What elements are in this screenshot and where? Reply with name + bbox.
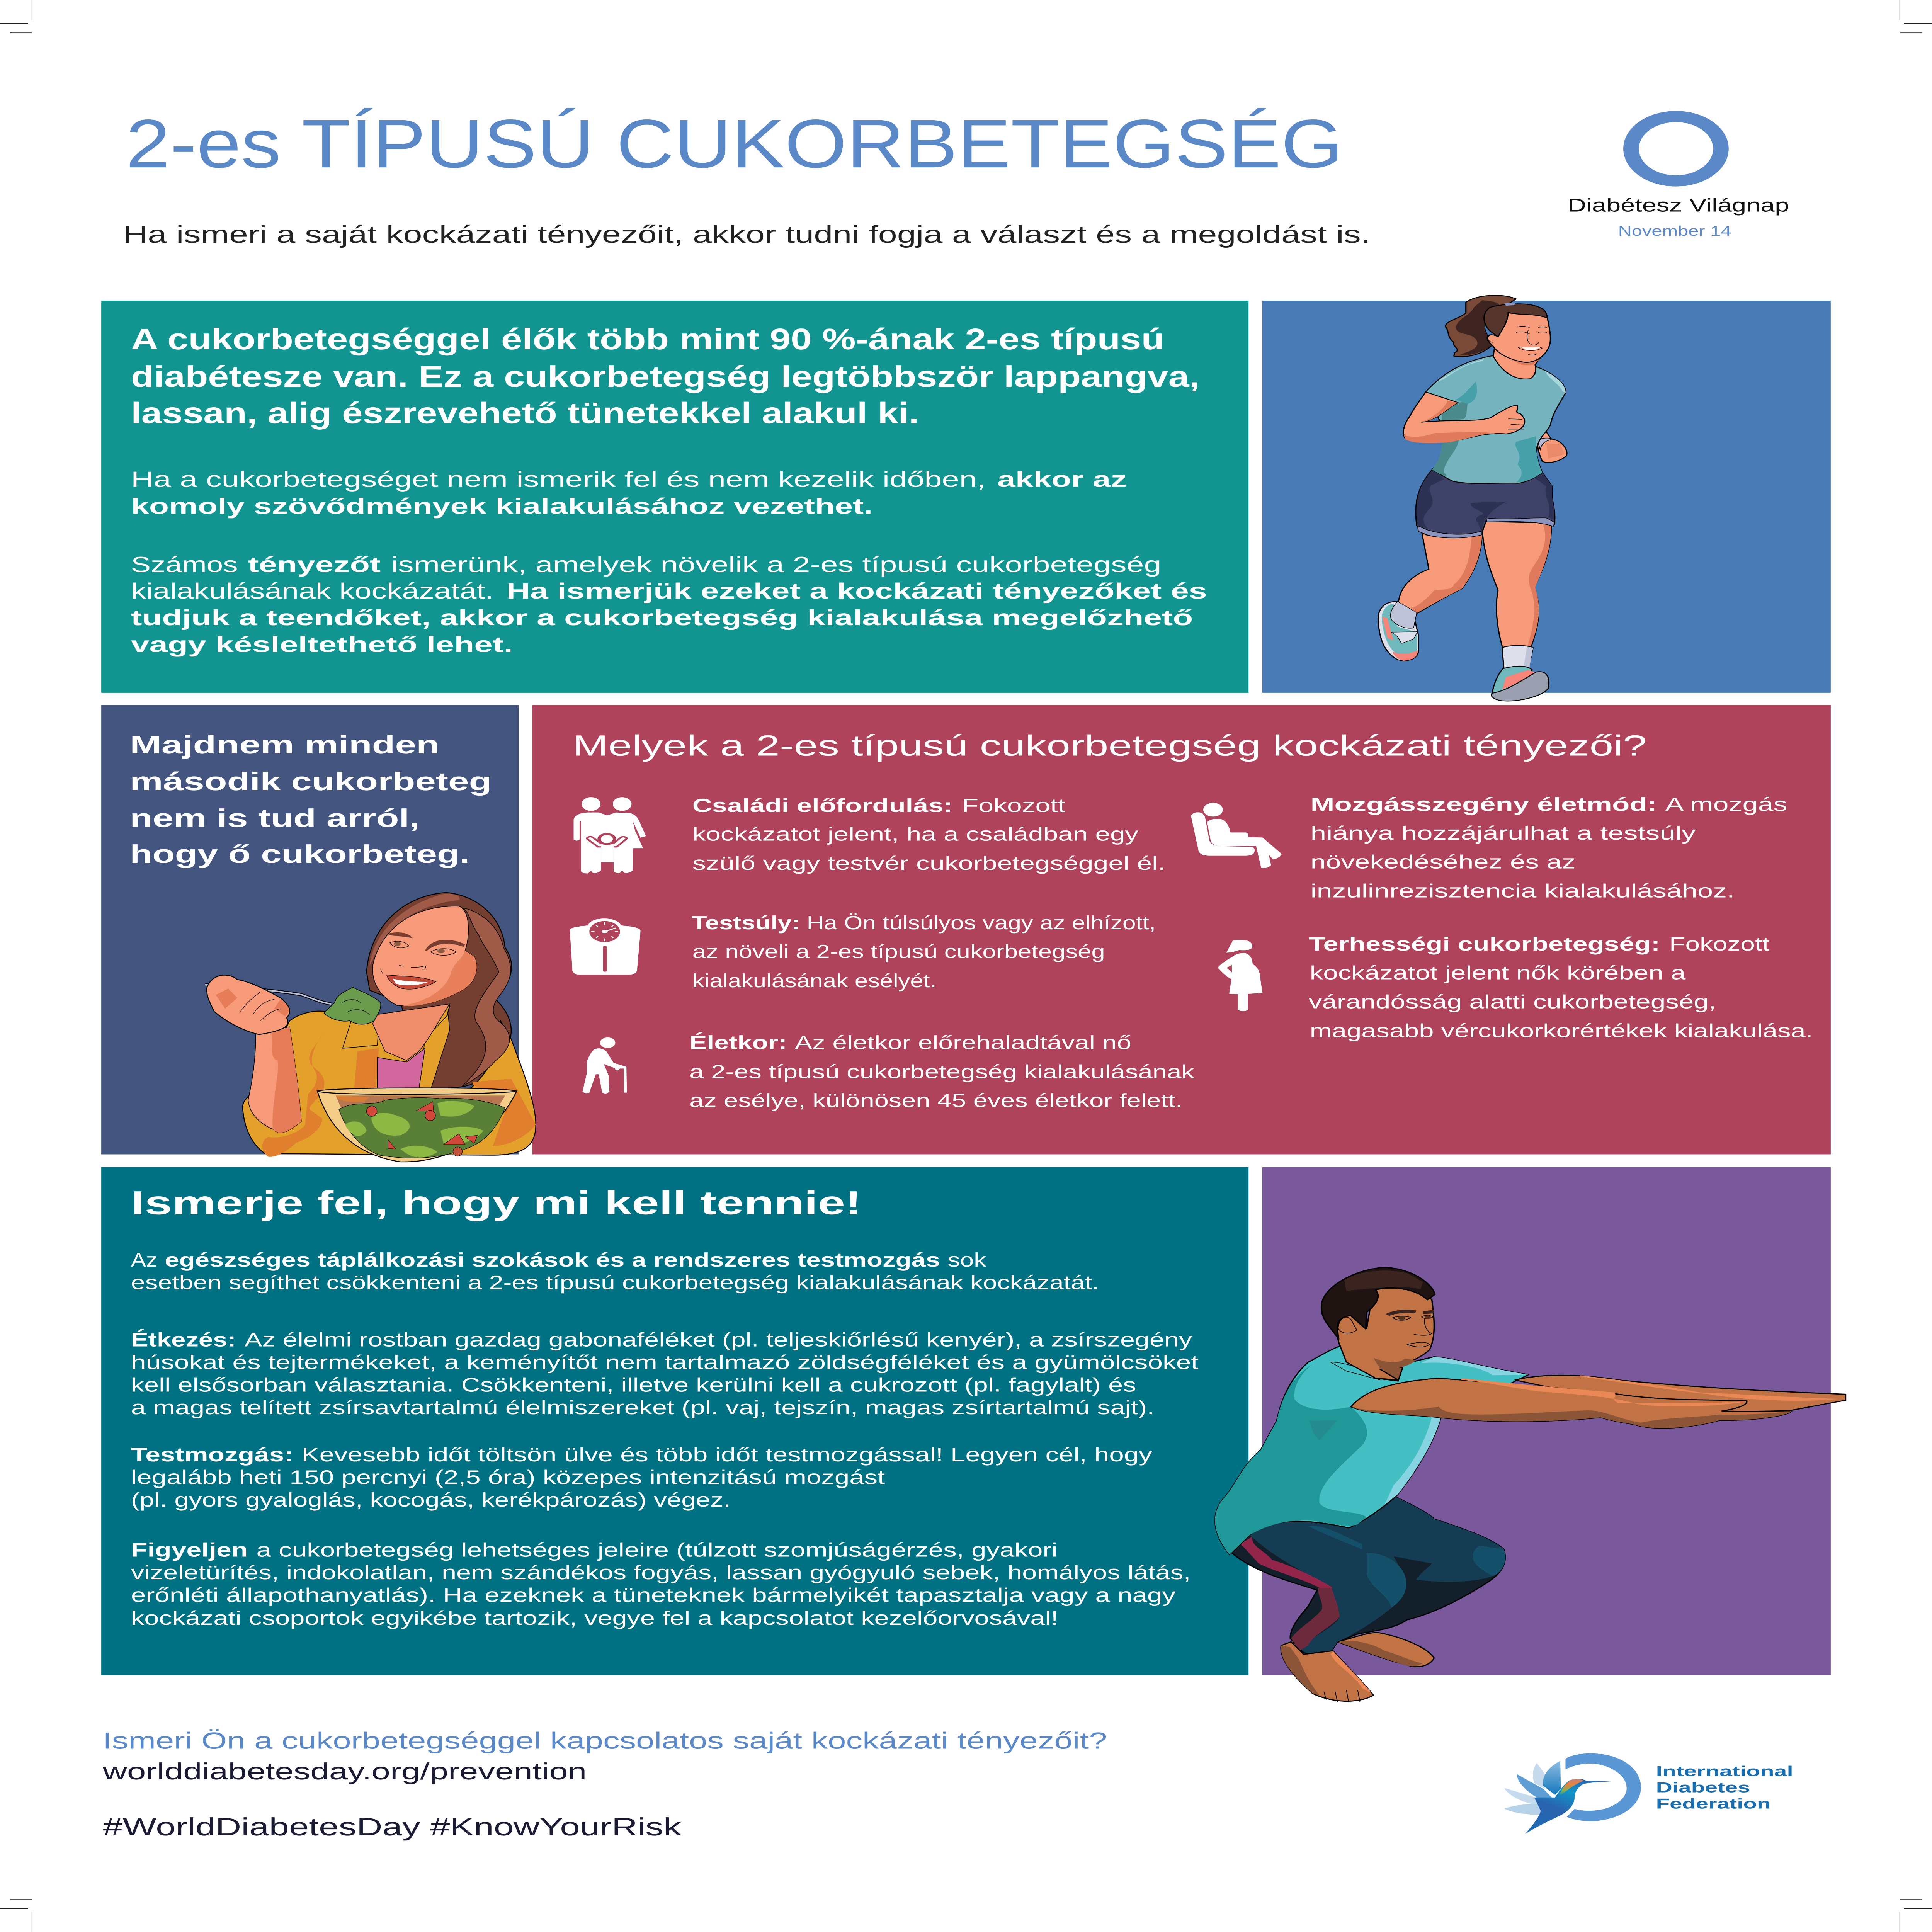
risk factors heading: Melyek a 2-es típusú cukorbetegség kockázati tényezői? xyxy=(573,729,1647,762)
age text: az esélye, különösen 45 éves életkor felett. xyxy=(689,1090,1182,1111)
sedentary lifestyle text xyxy=(1311,794,1787,901)
action intro: esetben segíthet csökkenteni a 2-es típusú cukorbetegség kialakulásának kockázatát. xyxy=(131,1271,1099,1294)
gestational diabetes text: várandósság alatti cukorbetegség, xyxy=(1309,991,1716,1012)
sedentary lifestyle text: növekedéséhez és az xyxy=(1311,851,1575,872)
warning signs advice: vizeletürítés, indokolatlan, nem szándékos fogyás, lassan gyógyuló sebek, homályos látás, xyxy=(131,1561,1190,1583)
body weight text: kialakulásának esélyét. xyxy=(692,970,937,992)
intro paragraph 1: akkor az xyxy=(997,467,1127,492)
action intro: sok xyxy=(947,1249,986,1271)
exercise advice: Testmozgás: xyxy=(131,1444,293,1466)
panel: intro text xyxy=(101,301,1248,693)
logo: World Diabetes Day circle: November 14 xyxy=(1618,223,1731,239)
footer question: Ismeri Ön a cukorbetegséggel kapcsolatos saját kockázati tényezőit? xyxy=(103,1728,1107,1754)
intro paragraph 1: komoly szövődmények kialakulásához vezethet. xyxy=(131,494,872,519)
exercise advice xyxy=(131,1444,1152,1511)
illustration: woman eating salad xyxy=(205,893,536,1162)
arm xyxy=(248,1027,301,1133)
intro paragraph 2 xyxy=(131,552,1207,657)
panel: risk factors xyxy=(532,705,1831,1154)
bowl xyxy=(317,1091,517,1162)
back shoe xyxy=(1378,601,1418,661)
lettuce on fork xyxy=(324,987,381,1024)
neck xyxy=(373,1004,450,1061)
undiagnosed statement: Majdnem minden xyxy=(130,731,439,759)
fork xyxy=(205,985,331,1004)
eating advice: a magas telített zsírsavtartalmú élelmiszereket (pl. vaj, tejszín, magas zsírtartalmú sajt). xyxy=(131,1396,1154,1418)
gestational diabetes text: Terhességi cukorbetegség: xyxy=(1309,934,1660,955)
footer link: worlddiabetesday.org/prevention xyxy=(102,1758,587,1784)
intro paragraph 2: vagy késleltethető lehet. xyxy=(131,632,513,657)
intro paragraph 1 xyxy=(131,467,1127,519)
icon: pregnant woman xyxy=(1218,940,1262,1011)
icon: elderly person xyxy=(583,1037,627,1094)
eating advice: Az élelmi rostban gazdag gabonaféléket (pl. teljeskiőrlésű kenyér), a zsírszegény xyxy=(245,1328,1192,1351)
exercise advice: (pl. gyors gyaloglás, kocogás, kerékpározás) végez. xyxy=(131,1489,731,1511)
pants dark base xyxy=(1232,1496,1505,1655)
sedentary lifestyle text: Mozgásszegény életmód: xyxy=(1311,794,1656,815)
neck and head xyxy=(1340,1339,1403,1381)
organisation name: Federation xyxy=(1656,1796,1770,1812)
organisation name xyxy=(1656,1763,1793,1812)
warning signs advice xyxy=(131,1539,1190,1629)
family history text: Fokozott xyxy=(962,795,1065,816)
sedentary lifestyle text: A mozgás xyxy=(1665,794,1787,815)
gestational diabetes text xyxy=(1309,934,1813,1042)
subtitle: Ha ismeri a saját kockázati tényezőit, akkor tudni fogja a választ és a megoldást is. xyxy=(123,221,1370,248)
age text xyxy=(689,1032,1195,1111)
warning signs advice: a cukorbetegség lehetséges jeleire (túlzott szomjúságérzés, gyakori xyxy=(257,1539,1058,1561)
neck and head xyxy=(1493,345,1543,379)
exercise advice: legalább heti 150 percnyi (2,5 óra) közepes intenzitású mozgást xyxy=(131,1466,885,1488)
front shoe xyxy=(1492,666,1532,694)
logo: World Diabetes Day circle: Diabétesz Világnap xyxy=(1568,195,1789,216)
front arm xyxy=(1351,1378,1792,1428)
warning signs advice: Figyeljen xyxy=(131,1539,248,1561)
action heading: Ismerje fel, hogy mi kell tennie! xyxy=(131,1184,862,1221)
left arm back xyxy=(1537,429,1567,463)
gestational diabetes text: magasabb vércukorkorértékek kialakulása. xyxy=(1310,1020,1813,1042)
panel: runner background xyxy=(1262,301,1831,693)
panel: undiagnosed fact xyxy=(101,705,519,1154)
intro paragraph 2: Ha ismerjük ezeket a kockázati tényezőket és xyxy=(507,579,1207,604)
intro paragraph 2: Számos xyxy=(131,552,238,577)
organisation name: International xyxy=(1656,1763,1793,1779)
warning signs advice: kockázati csoportok egyikébe tartozik, vegye fel a kapcsolatot kezelőorvosával! xyxy=(131,1607,1058,1629)
panel: exercise background xyxy=(1262,1167,1831,1675)
pants mid xyxy=(1250,1496,1505,1655)
jacket xyxy=(243,1005,536,1155)
title: 2-es TÍPUSÚ CUKORBETEGSÉG xyxy=(126,105,1343,182)
rear foot xyxy=(1337,1633,1434,1667)
age text: a 2-es típusú cukorbetegség kialakulásának xyxy=(689,1061,1195,1083)
intro paragraph 2: tényezőt xyxy=(248,552,381,577)
sedentary lifestyle text: inzulinrezisztencia kialakulásához. xyxy=(1311,880,1735,901)
intro heading: lassan, alig észrevehető tünetekkel alakul ki. xyxy=(131,396,919,430)
organisation name: Diabetes xyxy=(1656,1779,1750,1796)
face xyxy=(372,906,477,1006)
intro paragraph 2: tudjuk a teendőket, akkor a cukorbetegség kialakulása megelőzhető xyxy=(131,605,1193,630)
body weight text xyxy=(692,912,1156,992)
sedentary lifestyle text: hiánya hozzájárulhat a testsúly xyxy=(1311,823,1696,844)
shirt xyxy=(1426,355,1566,483)
intro heading: A cukorbetegséggel élők több mint 90 %-ának 2-es típusú xyxy=(131,322,1164,356)
action intro: Az xyxy=(131,1249,157,1271)
pants highlights xyxy=(1308,1526,1505,1608)
eating advice: Étkezés: xyxy=(131,1328,236,1351)
pink top xyxy=(378,1048,425,1090)
red stripe xyxy=(1241,1537,1333,1588)
action intro: egészséges táplálkozási szokások és a rendszeres testmozgás xyxy=(165,1249,940,1271)
body weight text: az növeli a 2-es típusú cukorbetegség xyxy=(692,941,1105,962)
warning signs advice: erőnléti állapothanyatlás). Ha ezeknek a tüneteknek bármelyikét tapasztalja vagy a nagy xyxy=(131,1584,1175,1606)
back leg xyxy=(1398,531,1482,613)
undiagnosed statement: hogy ő cukorbeteg. xyxy=(130,840,470,868)
icon: sitting person xyxy=(1191,803,1282,868)
body weight text: Testsúly: xyxy=(692,912,800,934)
exercise advice: Kevesebb időt töltsön ülve és több időt testmozgással! Legyen cél, hogy xyxy=(302,1444,1152,1466)
bowl rim xyxy=(317,1088,517,1094)
intro paragraph 1: Ha a cukorbetegséget nem ismerik fel és nem kezelik időben, xyxy=(131,467,985,492)
front foot xyxy=(1281,1642,1373,1701)
hashtags: #WorldDiabetesDay #KnowYourRisk xyxy=(103,1813,682,1841)
shirt xyxy=(1215,1346,1529,1554)
icon: weighing scale xyxy=(570,918,641,975)
undiagnosed statement: nem is tud arról, xyxy=(130,804,420,832)
logo: World Diabetes Day circle xyxy=(1568,117,1789,239)
icon: hummingbird and ring xyxy=(1504,1753,1641,1834)
age text: Életkor: xyxy=(689,1032,787,1053)
family history text: szülő vagy testvér cukorbetegséggel él. xyxy=(692,853,1165,874)
panel: what to do xyxy=(101,1167,1248,1675)
illustration: jogging woman xyxy=(1378,295,1567,701)
intro heading xyxy=(131,322,1199,430)
eating advice: kell elsősorban választania. Csökkenteni, illetve kerülni kell a cukrozott (pl. fagylalt) és xyxy=(131,1374,1136,1396)
undiagnosed statement xyxy=(130,731,492,868)
action intro xyxy=(131,1249,1099,1294)
gestational diabetes text: Fokozott xyxy=(1669,934,1769,955)
hand xyxy=(207,975,290,1034)
salad xyxy=(339,1098,505,1158)
eating advice xyxy=(131,1328,1199,1418)
front leg xyxy=(1482,522,1551,649)
front sock xyxy=(1502,646,1533,672)
eating advice: húsokat és tejtermékeket, a keményítőt nem tartalmazó zöldségféléket és a gyümölcsöket xyxy=(131,1351,1199,1373)
intro paragraph 2: ismerünk, amelyek növelik a 2-es típusú cukorbetegség xyxy=(391,552,1162,577)
gestational diabetes text: kockázatot jelent nők körében a xyxy=(1310,962,1686,983)
rear arm xyxy=(1515,1375,1845,1421)
undiagnosed statement: második cukorbeteg xyxy=(130,767,492,796)
family history text: kockázatot jelent, ha a családban egy xyxy=(692,824,1138,845)
age text: Az életkor előrehaladtával nő xyxy=(795,1032,1131,1053)
intro heading: diabétesze van. Ez a cukorbetegség legtöbbször lappangva, xyxy=(131,360,1199,393)
logo: International Diabetes Federation xyxy=(1504,1753,1793,1834)
intro paragraph 2: kialakulásának kockázatát. xyxy=(131,579,493,604)
shorts xyxy=(1416,470,1555,537)
icon: family xyxy=(573,797,646,874)
body weight text: Ha Ön túlsúlyos vagy az elhízott, xyxy=(807,912,1156,934)
family history text: Családi előfordulás: xyxy=(692,795,952,816)
illustration: man squatting xyxy=(1215,1268,1845,1702)
hair front strands xyxy=(462,908,510,1087)
family history text xyxy=(692,795,1165,874)
